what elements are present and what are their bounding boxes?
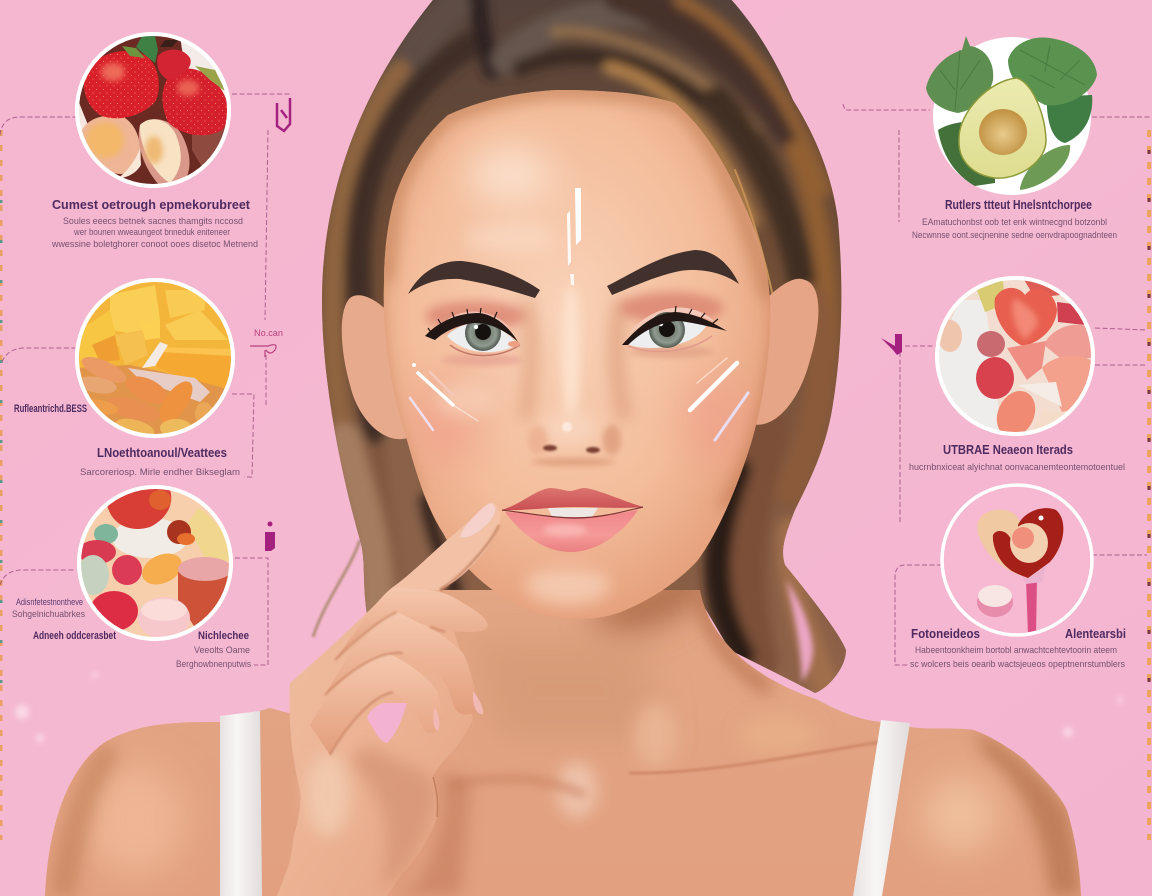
photo: mango and carrots circle (75, 278, 235, 441)
icon: right middle marker (881, 334, 902, 355)
text: top right block: Rutlers ttteut Hnelsntchorpee (945, 198, 1092, 212)
right cheek marks (690, 358, 748, 440)
text: lower right block (910, 627, 1126, 670)
text: lower left side block: Berghowbnenputwis (176, 659, 251, 670)
icon: lower left marker (265, 522, 275, 551)
forehead marks (567, 188, 581, 285)
text: top right block: Necwnnse oont.secjnenine sedne oenvdrapoognadnteen (912, 230, 1117, 241)
text: middle left block: LNoethtoanoul/Veattees (97, 446, 227, 460)
right strap (853, 720, 910, 896)
edge confetti strips (1, 130, 1149, 840)
left strap (220, 711, 262, 896)
fingernails (433, 503, 495, 731)
label: middle left note: No.can (254, 328, 283, 338)
connector lines (0, 94, 1150, 665)
text: middle left block: Sarcoreriosp. Mirle endher Bikseglam (80, 467, 240, 478)
text: lower left notes (12, 597, 116, 642)
text: lower right block: sc wolcers beis oearib wactsjeueos opeptnenrstumblers (910, 659, 1125, 670)
photo: strawberries circle (75, 32, 232, 189)
text: top left block: wwessine boletghorer conoot ooes disetoc Metnend (51, 239, 258, 250)
left eye (425, 308, 520, 356)
left ear (342, 295, 407, 439)
text: lower left side block: Nichlechee (198, 630, 249, 642)
hair (313, 0, 846, 693)
text: lower left notes: Adneeh oddcerasbet (33, 630, 116, 642)
face (384, 90, 770, 618)
photo: strawberry hearts circle (935, 276, 1096, 443)
text: lower right block: Habeentoonkheim bortobl anwachtcehtevtoorin ateem (915, 645, 1117, 656)
text: top left block: wer bounen wweaungeot bnneduk eniteneer (73, 227, 230, 238)
text: lower right block: Alentearsbi (1065, 627, 1126, 641)
text: lower left side block: Veeolts Oame (194, 645, 250, 656)
left eyebrow (408, 261, 540, 298)
hand (277, 502, 500, 896)
text: middle right block: hucrnbnxiceat alyichnat oonvacanemteontemotoentuel (909, 462, 1125, 473)
left cheek marks (410, 363, 478, 430)
soft sparkles (15, 672, 1123, 742)
text: lower left side block (176, 630, 251, 670)
icon: middle left marker (250, 345, 276, 357)
text: middle left block (80, 446, 240, 478)
right ear (752, 279, 818, 425)
right eye (622, 306, 727, 351)
text: lower right block: Fotoneideos (911, 627, 980, 641)
lips (502, 488, 643, 552)
text: lower left notes: Sohgelnichuabrkes (12, 609, 85, 620)
photo: avocado and leaves (926, 36, 1097, 195)
text: middle right block: UTBRAE Neaeon Iterads (943, 443, 1073, 457)
icon: top left marker (277, 98, 290, 131)
nose (528, 285, 621, 466)
text: middle right block (909, 443, 1125, 473)
text: lower left notes: Adisnfetestnontheve (16, 597, 83, 607)
text: rich label left: Rufleantrichd.BESS (14, 403, 87, 415)
photo: heart and cream circle (942, 485, 1092, 635)
right eyebrow (607, 250, 739, 295)
text: top right block (912, 198, 1117, 241)
text: top left block: Soules eeecs betnek sacnes thamgits nccosd (63, 216, 243, 227)
photo: sweets and jars circle (77, 485, 235, 641)
text: top left block (51, 198, 258, 250)
text: top left block: Cumest oetrough epmekorubreet (52, 198, 251, 212)
eye shadow (425, 292, 724, 366)
shoulders and chest (45, 565, 1081, 896)
text: top right block: EAmatuchonbst oob tet enk wintnecgnd botzonbl (922, 217, 1107, 228)
